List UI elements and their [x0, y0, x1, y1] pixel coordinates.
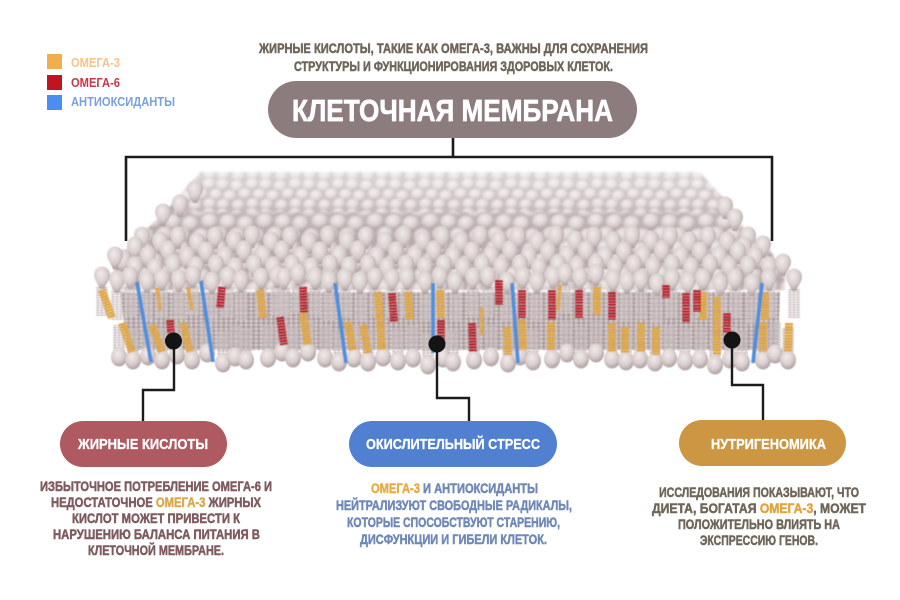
connector: oxidative stress	[428, 336, 469, 421]
heading pill: oxidative stress: ОКИСЛИТЕЛЬНЫЙ СТРЕСС	[366, 435, 540, 453]
text block: nutrigenomics: ДИЕТА, БОГАТАЯ ОМЕГА-3, МОЖЕТ	[652, 501, 867, 516]
heading pill: nutrigenomics	[679, 420, 846, 466]
intro text: ЖИРНЫЕ КИСЛОТЫ, ТАКИЕ КАК ОМЕГА-3, ВАЖНЫ ДЛЯ СОХРАНЕНИЯ	[258, 41, 648, 56]
legend	[47, 54, 175, 110]
heading pill: oxidative stress	[349, 421, 557, 467]
legend: antioxidants: АНТИОКСИДАНТЫ	[71, 94, 175, 109]
text block: nutrigenomics	[652, 485, 867, 548]
heading pill: nutrigenomics: НУТРИГЕНОМИКА	[711, 436, 826, 453]
text block: oxidative stress: ДИСФУНКЦИИ И ГИБЕЛИ КЛЕТОК.	[360, 532, 547, 547]
omega-6 tails	[170, 280, 727, 352]
antioxidant strands	[137, 281, 762, 363]
text block: fatty acids: НЕДОСТАТОЧНОЕ ОМЕГА-3 ЖИРНЫХ	[51, 495, 261, 510]
connector: fatty acids	[143, 332, 182, 421]
text block: nutrigenomics: ЭКСПРЕССИЮ ГЕНОВ.	[700, 533, 818, 548]
title pill	[268, 81, 637, 138]
connector: nutrigenomics	[724, 332, 763, 421]
text block: nutrigenomics: ПОЛОЖИТЕЛЬНО ВЛИЯТЬ НА	[678, 517, 840, 532]
text block: oxidative stress	[336, 481, 572, 547]
bracket connector from title to membrane	[126, 138, 772, 241]
text block: fatty acids: НАРУШЕНИЮ БАЛАНСА ПИТАНИЯ В	[53, 527, 260, 542]
heading pill: fatty acids: ЖИРНЫЕ КИСЛОТЫ	[77, 436, 208, 453]
upper leaflet phospholipids	[94, 264, 802, 323]
legend: omega-6: ОМЕГА-6	[71, 75, 120, 90]
intro text: СТРУКТУРЫ И ФУНКЦИОНИРОВАНИЯ ЗДОРОВЫХ КЛЕТОК.	[294, 59, 613, 74]
text block: oxidative stress: ОМЕГА-3 И АНТИОКСИДАНТЫ	[371, 481, 538, 496]
cell membrane bilayer illustration	[94, 172, 802, 374]
phospholipid tails band	[94, 264, 802, 374]
text block: fatty acids	[40, 479, 272, 558]
omega-3 tails	[102, 285, 789, 355]
text block: fatty acids: КИСЛОТ МОЖЕТ ПРИВЕСТИ К	[72, 511, 241, 526]
title pill: КЛЕТОЧНАЯ МЕМБРАНА	[292, 93, 613, 128]
membrane top surface	[112, 172, 785, 290]
lower leaflet phospholipids	[111, 320, 796, 374]
edge heads	[107, 180, 791, 279]
text block: fatty acids: ИЗБЫТОЧНОЕ ПОТРЕБЛЕНИЕ ОМЕГА-6 И	[40, 479, 272, 494]
heading pill: fatty acids	[60, 421, 227, 467]
intro text	[258, 41, 648, 74]
legend: omega-3: ОМЕГА-3	[71, 55, 120, 70]
text block: oxidative stress: НЕЙТРАЛИЗУЮТ СВОБОДНЫЕ РАДИКАЛЫ,	[336, 498, 572, 513]
text block: fatty acids: КЛЕТОЧНОЙ МЕМБРАНЕ.	[88, 543, 224, 558]
text block: oxidative stress: КОТОРЫЕ СПОСОБСТВУЮТ СТАРЕНИЮ,	[347, 515, 560, 530]
middle rows of heads	[127, 226, 763, 281]
